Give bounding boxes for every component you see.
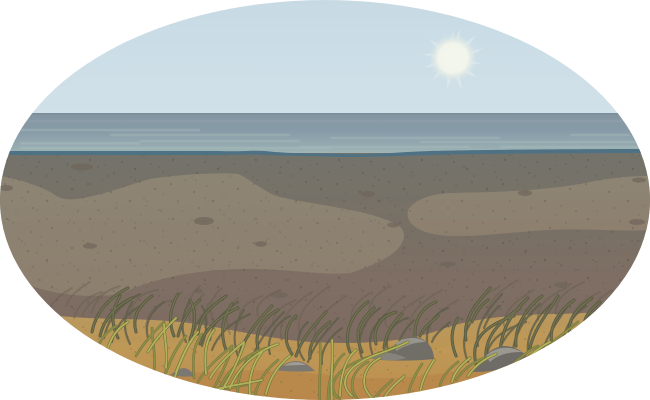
waterline <box>0 149 650 157</box>
sky <box>0 0 650 114</box>
dark seagrass <box>92 288 612 370</box>
sediment pebbles <box>0 164 646 298</box>
sand seabed <box>60 312 594 400</box>
faint background seagrass <box>48 280 646 344</box>
light seagrass <box>92 318 590 400</box>
light sediment band: left <box>0 173 404 296</box>
light sediment band: right <box>408 176 650 236</box>
sun <box>424 30 481 87</box>
rocks <box>170 337 528 377</box>
sea <box>0 113 650 154</box>
upper dark soil <box>0 153 650 343</box>
